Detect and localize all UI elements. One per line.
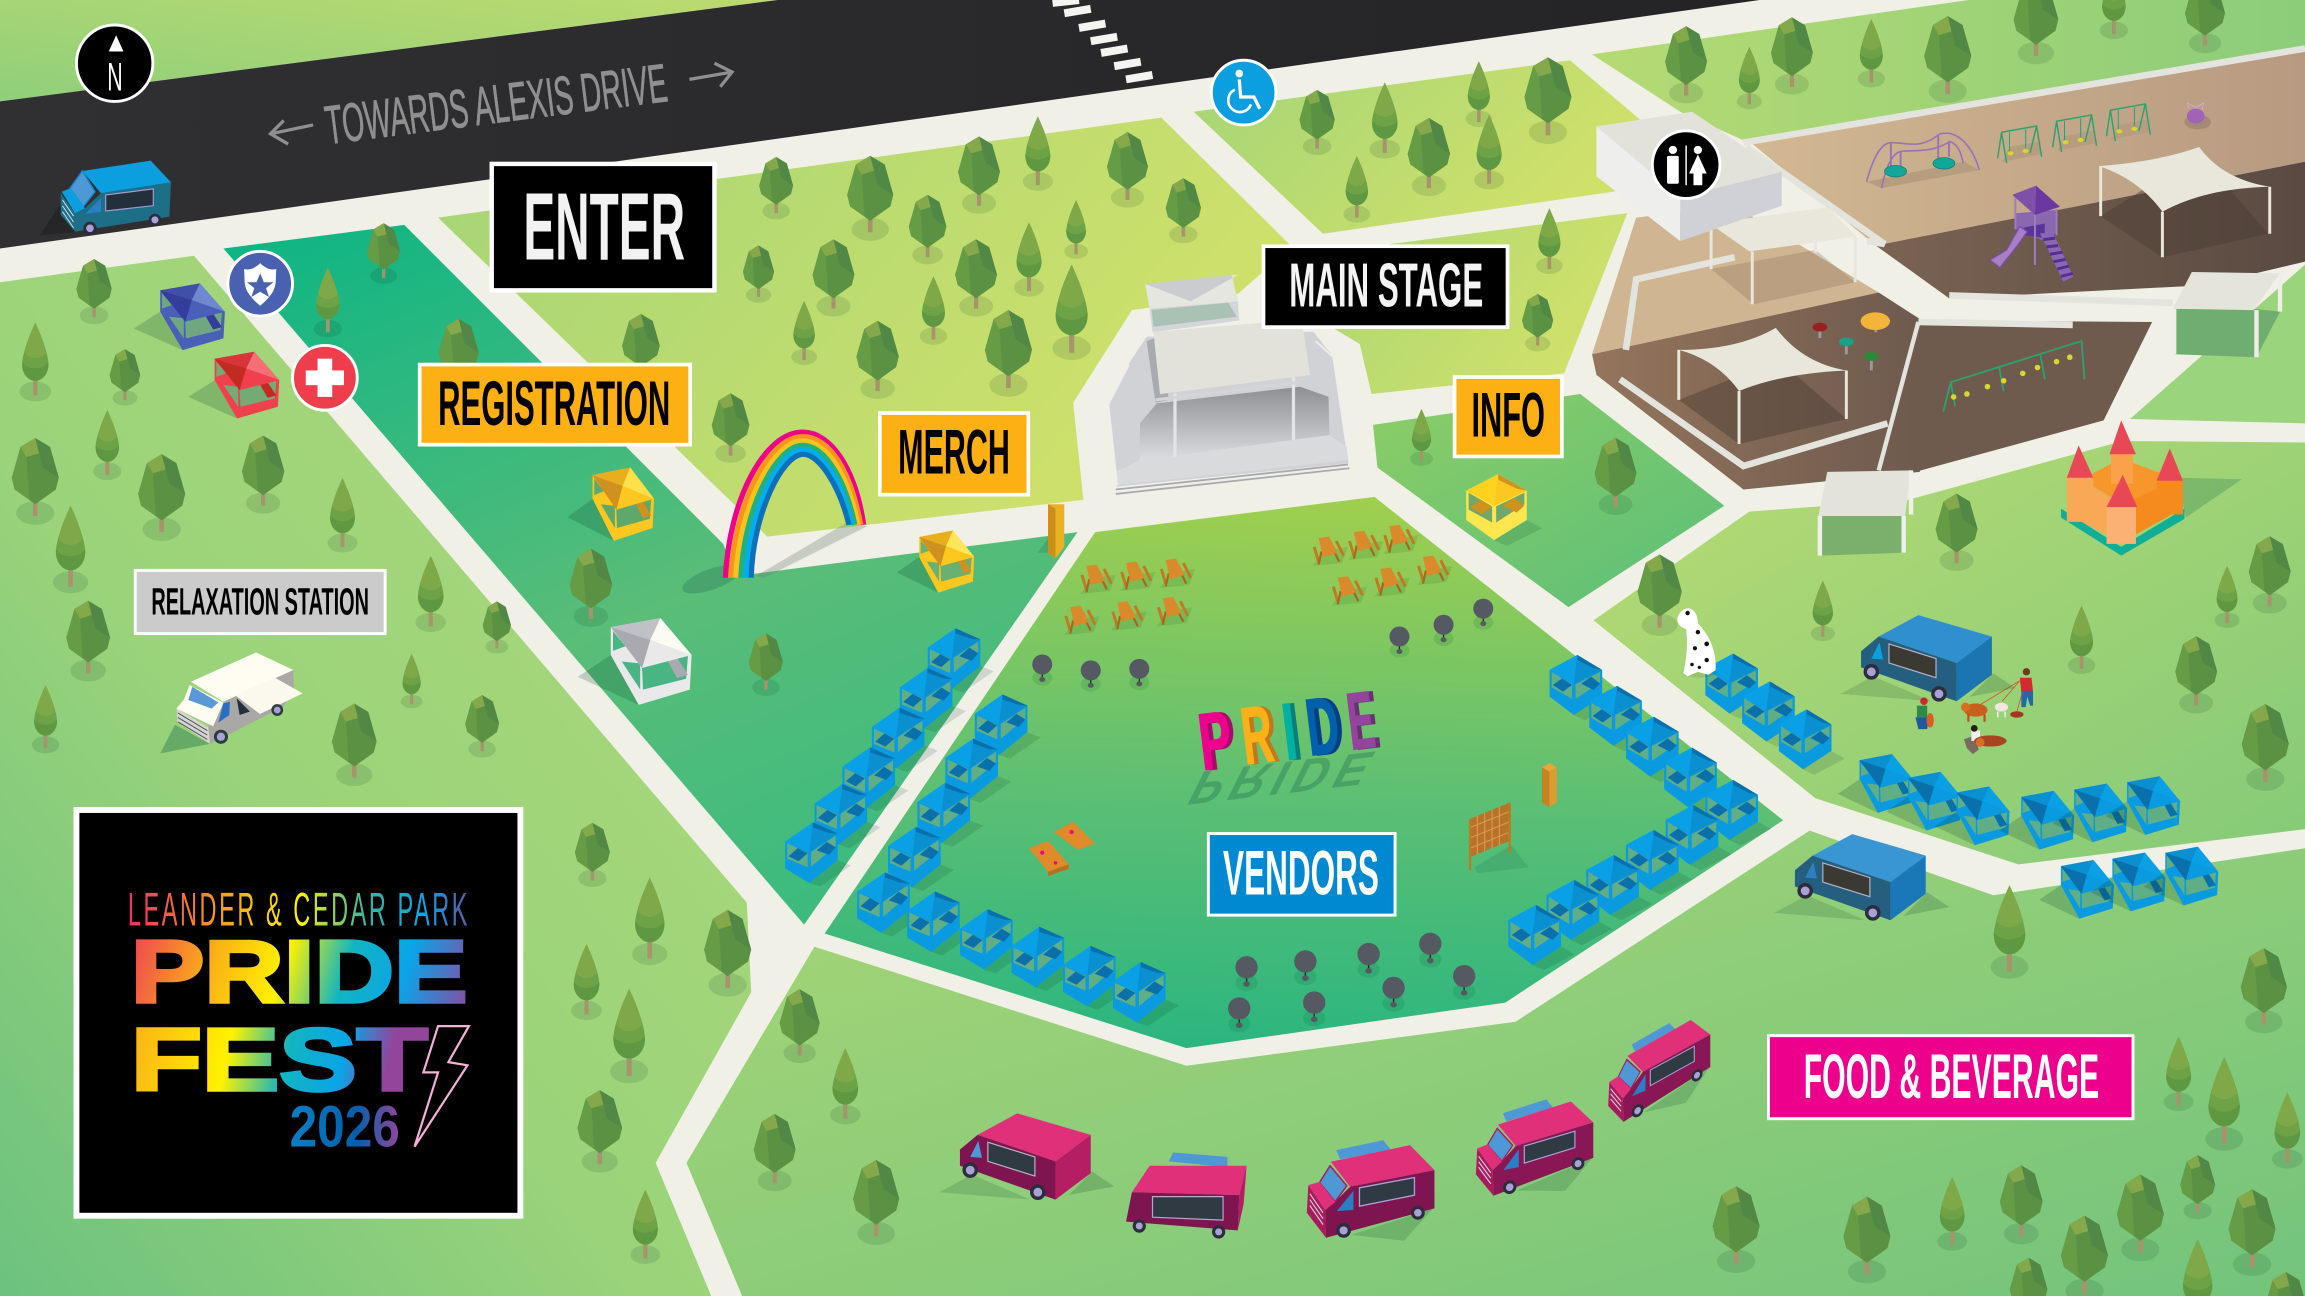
colored service tents xyxy=(134,283,1542,705)
road direction text: TOWARDS ALEXIS DRIVE xyxy=(322,52,671,156)
post: yellow sign xyxy=(1038,504,1064,559)
shade sail: south-west xyxy=(1679,328,1846,444)
label: registration xyxy=(420,365,690,445)
lawn: north-centre xyxy=(438,118,1291,537)
vendor tents xyxy=(785,622,2218,1032)
shade sail: north-east xyxy=(2099,147,2270,257)
bounce castle xyxy=(2061,420,2242,556)
lawn: behind stage north xyxy=(1194,60,1646,234)
dark surface north xyxy=(1876,162,2305,298)
3D PRIDE letters: I xyxy=(1282,687,1306,778)
3D PRIDE letters: R xyxy=(1236,689,1278,782)
connect four xyxy=(1470,803,1529,873)
3D PRIDE letters: D xyxy=(1301,680,1344,773)
truck: pink 4 xyxy=(1476,1094,1593,1200)
arrow: right xyxy=(689,63,732,87)
logo: year: 2026 xyxy=(290,1095,400,1160)
tent: info xyxy=(1466,474,1542,546)
road xyxy=(0,0,1760,248)
lawn: info zone xyxy=(1373,394,1724,607)
swing sets north xyxy=(1998,104,2150,163)
cornhole boards xyxy=(1029,822,1095,876)
truck: pink 2 xyxy=(1126,1153,1247,1239)
lawn: registration green xyxy=(223,225,1078,925)
main stage xyxy=(1108,275,1349,494)
icon: first aid xyxy=(293,345,357,410)
curbs xyxy=(1620,49,2305,470)
people and dogs xyxy=(1915,668,2033,754)
lawn: vendors zone xyxy=(825,497,1783,1048)
label: vendors xyxy=(1208,834,1395,915)
kneeling man and dog xyxy=(1915,697,1934,729)
3D PRIDE letters: D xyxy=(1305,680,1348,773)
truck: blue food truck north xyxy=(1840,615,2015,702)
3D PRIDE letters: P xyxy=(1198,695,1241,788)
3D PRIDE letters: R xyxy=(1241,689,1282,782)
logo: fest: FEST xyxy=(131,1010,428,1109)
3D PRIDE letters: E xyxy=(1342,675,1379,768)
brown surface south-west xyxy=(1592,293,1920,490)
tan surface north xyxy=(1751,51,2305,245)
lawn: beside stage xyxy=(1279,213,1627,394)
label: enter: ENTER xyxy=(523,174,685,280)
3D PRIDE letters: E xyxy=(1347,675,1384,768)
3D PRIDE letters: I xyxy=(1277,687,1302,778)
icon: wheelchair accessible xyxy=(1211,60,1276,125)
label: main stage: MAIN STAGE xyxy=(1289,252,1483,321)
dogs on leash xyxy=(1961,703,2023,722)
swing set south xyxy=(1943,341,2084,412)
slide tower xyxy=(1990,186,2073,282)
tent: registration xyxy=(567,468,654,541)
label: enter xyxy=(492,164,714,290)
icon: lightning bolt xyxy=(415,1026,469,1147)
lawn: north-west xyxy=(0,0,778,101)
label: merch: MERCH xyxy=(898,417,1010,487)
bistro tables xyxy=(1032,599,1493,1032)
spring rider: purple xyxy=(2184,103,2211,129)
truck: pink 3 xyxy=(1307,1140,1434,1241)
lawn: west xyxy=(0,256,751,1296)
canopy: east xyxy=(2173,272,2280,357)
3D PRIDE letters xyxy=(1179,675,1384,816)
trucks xyxy=(40,161,2015,1241)
icon: north compass: N xyxy=(107,55,123,99)
truck: pink 1 xyxy=(939,1113,1114,1200)
label: relaxation station xyxy=(135,570,385,634)
label: food and beverage xyxy=(1768,1036,2133,1119)
3D PRIDE letters: P xyxy=(1194,695,1237,788)
truck: blue food truck south xyxy=(1774,834,1949,921)
icon: security xyxy=(228,251,293,316)
truck: blue van on road xyxy=(40,161,171,235)
dalmatian statue xyxy=(1677,608,1717,678)
icon: restrooms xyxy=(1652,131,1720,198)
icon: north compass xyxy=(76,25,153,101)
label: registration: REGISTRATION xyxy=(438,369,670,439)
climbing arcs xyxy=(1867,133,1979,188)
label: vendors: VENDORS xyxy=(1223,839,1379,909)
seated man and dog xyxy=(1964,725,2007,754)
canopy: south xyxy=(1818,470,1911,556)
crosswalk xyxy=(1053,0,1152,79)
picnic tables xyxy=(1064,525,1452,635)
label: main stage xyxy=(1263,246,1508,327)
tent: merch xyxy=(897,531,974,593)
arrow: left xyxy=(270,121,313,144)
tan surface south xyxy=(1592,206,1879,354)
label: info: INFO xyxy=(1471,381,1545,451)
lawn: south xyxy=(687,831,2305,1296)
label: info xyxy=(1455,377,1562,456)
rainbow arch xyxy=(679,432,867,599)
label: relaxation station: RELAXATION STATION xyxy=(151,580,369,623)
playground xyxy=(1592,49,2305,556)
pavilion xyxy=(1710,207,1857,304)
giant jenga xyxy=(1542,763,1557,807)
logo: pride: PRIDE xyxy=(131,922,467,1021)
label: merch xyxy=(880,413,1028,495)
lawn games xyxy=(1029,763,1557,876)
tent: relaxation xyxy=(578,618,692,705)
logo panel xyxy=(76,810,520,1216)
lawn: north-east xyxy=(1592,0,2305,140)
letter shadow: PRIDE xyxy=(1179,741,1383,816)
spring riders south xyxy=(1813,312,1890,370)
tent: security xyxy=(134,283,225,350)
restroom building xyxy=(1596,112,1782,241)
lawn: south-east xyxy=(1594,441,2305,864)
truck: white relaxation van xyxy=(160,652,303,753)
woman walking dogs xyxy=(1979,668,2033,712)
lawn: far east xyxy=(2130,265,2305,423)
brown surface south-east xyxy=(1915,320,2152,472)
logo: leander and cedar park: LEANDER & CEDAR PARK xyxy=(128,882,468,936)
tent: first aid xyxy=(188,352,279,419)
truck: pink 5 xyxy=(1608,1009,1710,1130)
